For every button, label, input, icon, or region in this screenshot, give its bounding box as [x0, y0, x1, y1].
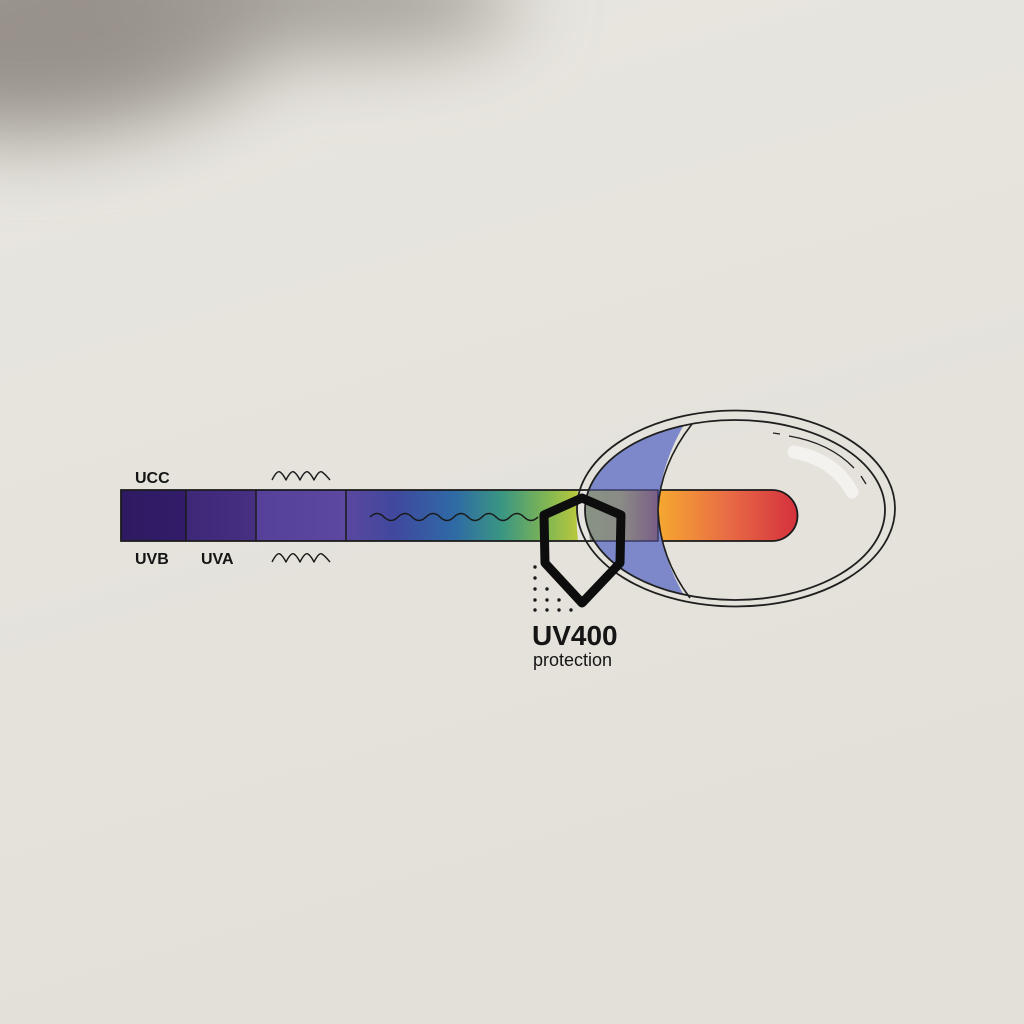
icon: shield [544, 498, 621, 603]
UV400 protection label: UV400 [532, 620, 618, 651]
highlight [794, 452, 852, 492]
dots pattern [533, 565, 573, 612]
labels: UCC [135, 470, 170, 487]
lens crescent [586, 426, 683, 594]
UV400 protection label [532, 620, 618, 670]
labels: UVB [135, 551, 169, 568]
labels: UVA [201, 551, 234, 568]
spectrum bar [121, 490, 798, 541]
wave in bar [370, 514, 538, 520]
labels [135, 470, 234, 568]
UV400 protection label: protection [533, 650, 612, 670]
icon: small waves [272, 472, 330, 562]
background shadow [0, 0, 520, 168]
eye [576, 410, 896, 608]
